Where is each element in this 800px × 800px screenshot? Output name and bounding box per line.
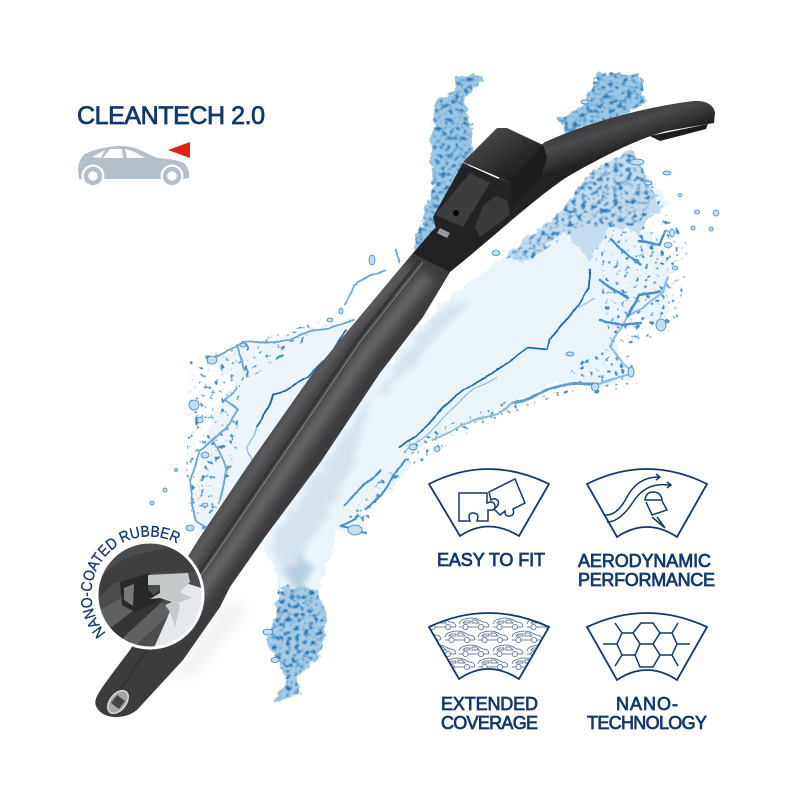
connector: lever — [475, 196, 510, 237]
feature: nano-technology: TECHNOLOGY — [587, 713, 707, 733]
feature: aerodynamic performance — [578, 469, 715, 590]
wiper blade — [80, 101, 715, 730]
splash: sparse blue speckle — [185, 165, 690, 535]
splash: top left stream — [416, 75, 480, 252]
blade: upper arm and connector base — [380, 101, 715, 347]
label: EXTENDED — [441, 694, 538, 714]
feature: nano-technology — [587, 613, 707, 733]
connector: side — [510, 145, 547, 205]
connector: clip face — [435, 173, 490, 227]
icon: blade section — [645, 492, 667, 528]
icon: airflow arrows — [605, 474, 671, 522]
blade: rubber tip — [650, 124, 708, 141]
connector: clip base — [433, 163, 512, 248]
inset: lens — [98, 544, 202, 646]
water splash — [150, 73, 719, 703]
blade: lower arm — [95, 253, 450, 718]
red marker — [168, 142, 190, 158]
splash: main pale body — [263, 150, 677, 590]
wedge — [429, 469, 549, 536]
inset: ring — [97, 542, 203, 648]
car wheels — [82, 164, 184, 188]
icon: hexagon mesh — [603, 623, 690, 667]
wedge — [429, 613, 549, 679]
feature: extended coverage — [428, 612, 550, 730]
feature: easy to fit — [429, 469, 549, 570]
car body — [78, 146, 189, 179]
splash: left pale body — [190, 320, 353, 535]
car windows — [92, 149, 145, 158]
splash: lower falling stream — [267, 585, 327, 703]
inset: curved label: NANO-COATED RUBBER — [81, 526, 180, 639]
label: EASY TO FIT — [437, 550, 545, 570]
splash: top right crown — [558, 73, 645, 135]
soft shadow under blade — [170, 600, 245, 680]
droplets — [150, 100, 719, 662]
connector: slot — [437, 228, 450, 238]
wedge — [587, 469, 707, 537]
icon: puzzle pieces — [459, 493, 495, 521]
connector: cover — [463, 128, 543, 182]
icon: car with red marker — [78, 142, 190, 188]
inset: nano-coated rubber — [81, 526, 204, 650]
wedge — [587, 613, 707, 680]
splash: grey flow streaks — [270, 300, 470, 590]
splash: band below upper arm — [505, 150, 660, 262]
label: AERODYNAMIC — [578, 551, 711, 571]
label: NANO- — [616, 694, 678, 714]
blade: brand logo — [104, 687, 132, 717]
icon: car pattern — [430, 618, 548, 670]
splash: flow contour lines — [190, 232, 667, 533]
connector: pin hole — [453, 210, 459, 216]
title: CLEANTECH 2.0 — [77, 102, 265, 130]
feature: aerodynamic performance: PERFORMANCE — [578, 570, 715, 590]
feature: extended coverage: COVERAGE — [441, 713, 538, 733]
